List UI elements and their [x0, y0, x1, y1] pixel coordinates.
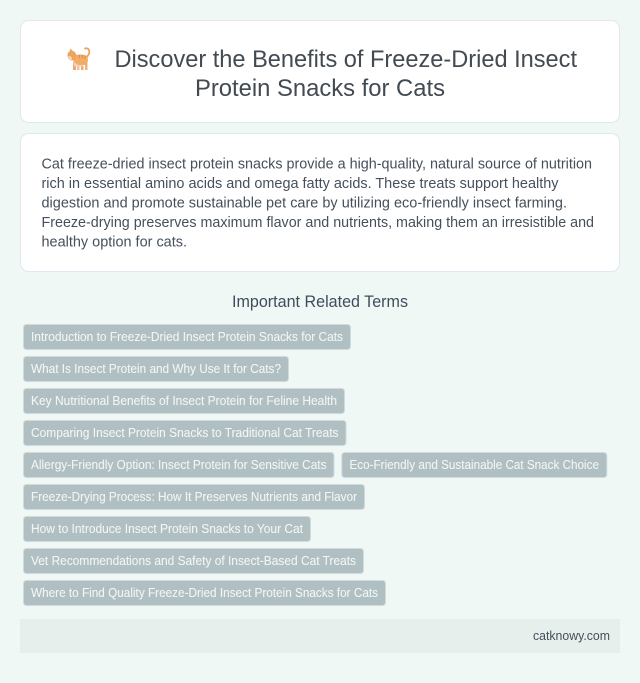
tag: what is insect protein [24, 356, 288, 382]
heading: related terms: Important Related Terms [232, 293, 408, 311]
footer [20, 619, 620, 653]
footer: catknowy.com [533, 628, 610, 643]
text block: description: Cat freeze-dried insect protein snacks provide a high-quality, natural source of nutrition [42, 156, 592, 172]
tag: where to find: Where to Find Quality Freeze-Dried Insect Protein Snacks for Cats [31, 586, 378, 600]
title: Discover the Benefits of Freeze-Dried Insect [114, 46, 577, 73]
tag: allergy-friendly [24, 452, 334, 478]
tag: introduction [24, 324, 350, 350]
tag: eco-friendly: Eco-Friendly and Sustainable Cat Snack Choice [350, 458, 599, 472]
tag: what is insect protein: What Is Insect Protein and Why Use It for Cats? [31, 362, 281, 376]
text block: description: Freeze-drying preserves maximum flavor and nutrients, making them an irresistible and [42, 215, 594, 231]
tag: vet recommendations [24, 548, 364, 574]
tag: comparing snacks: Comparing Insect Protein Snacks to Traditional Cat Treats [31, 426, 338, 440]
tag: freeze-drying process [24, 484, 364, 510]
title: Protein Snacks for Cats [195, 75, 445, 102]
panel: description [20, 134, 620, 272]
tag: nutritional benefits [24, 388, 344, 414]
tag: freeze-drying process: Freeze-Drying Process: How It Preserves Nutrients and Flavor [31, 490, 357, 504]
text block: description [42, 156, 594, 250]
tag: introduction: Introduction to Freeze-Dried Insect Protein Snacks for Cats [31, 330, 343, 344]
panel: title card [20, 20, 620, 122]
tag: nutritional benefits: Key Nutritional Benefits of Insect Protein for Feline Health [31, 394, 337, 408]
text block: description: digestion and promote sustainable pet care by utilizing eco-friendly insect farming. [42, 195, 567, 211]
tag: eco-friendly [342, 452, 607, 478]
tag: where to find [24, 580, 386, 606]
tag: how to introduce: How to Introduce Insect Protein Snacks to Your Cat [31, 522, 304, 536]
text block: description: rich in essential amino acids and omega fatty acids. These treats support healthy [42, 176, 559, 192]
tag: allergy-friendly: Allergy-Friendly Option: Insect Protein for Sensitive Cats [31, 458, 326, 472]
title [114, 46, 577, 102]
text block: description: healthy option for cats. [42, 234, 187, 250]
tag: vet recommendations: Vet Recommendations and Safety of Insect-Based Cat Treats [31, 554, 356, 568]
icon: cat [68, 48, 89, 70]
tag: comparing snacks [24, 420, 346, 446]
tag: how to introduce [24, 516, 310, 542]
